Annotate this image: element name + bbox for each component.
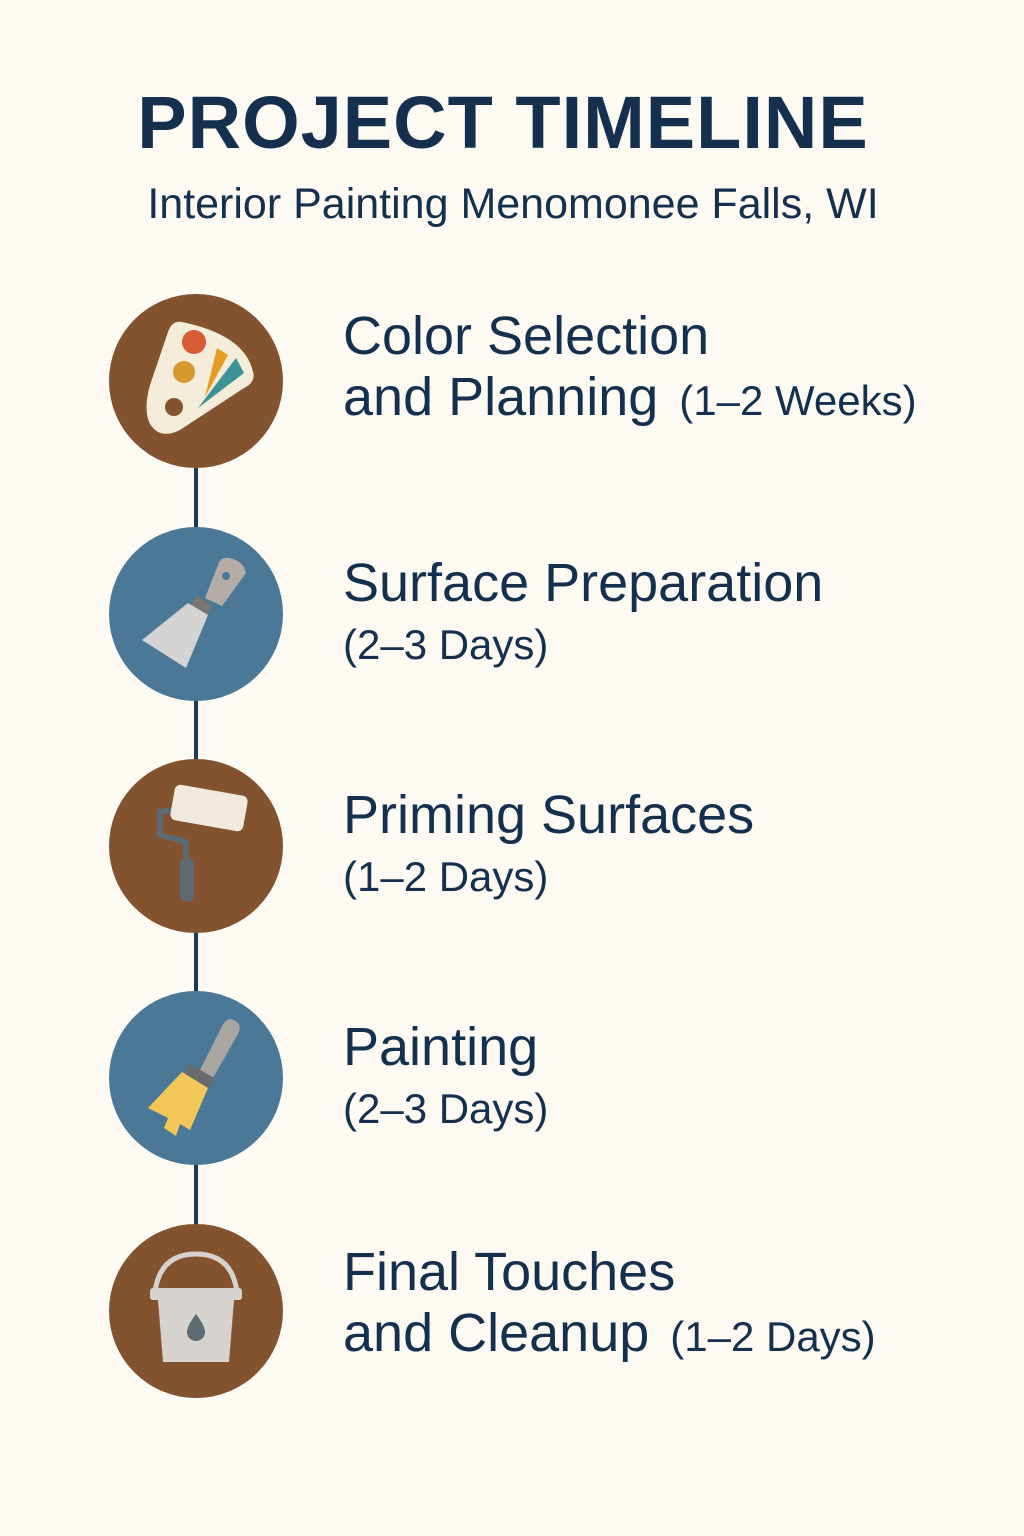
subtitle: Interior Painting Menomonee Falls, WI xyxy=(147,180,879,228)
step 3 text xyxy=(343,785,754,900)
step 3 text: Priming Surfaces xyxy=(343,785,754,845)
icon: color palette xyxy=(109,294,283,468)
step 3 text: (1–2 Days) xyxy=(343,853,548,900)
step 4 text: (2–3 Days) xyxy=(343,1085,548,1132)
icon: roller xyxy=(109,759,283,933)
icon: bucket xyxy=(109,1224,283,1398)
step 1 text xyxy=(343,306,917,427)
step 5 text: and Cleanup (1–2 Days) xyxy=(343,1303,876,1363)
step 5 text xyxy=(343,1242,876,1363)
step 2 text: (2–3 Days) xyxy=(343,621,548,668)
step 2 text: Surface Preparation xyxy=(343,553,823,613)
step 1 text: Color Selection xyxy=(343,306,709,366)
title: PROJECT TIMELINE xyxy=(137,81,869,164)
timeline graphic xyxy=(109,294,283,1398)
step 2 text xyxy=(343,553,823,668)
icon: brush xyxy=(109,991,283,1165)
step 4 text: Painting xyxy=(343,1017,538,1077)
step 5 text: Final Touches xyxy=(343,1242,675,1302)
icon: scraper xyxy=(109,527,283,701)
step 4 text xyxy=(343,1017,548,1132)
step 1 text: and Planning (1–2 Weeks) xyxy=(343,367,917,427)
